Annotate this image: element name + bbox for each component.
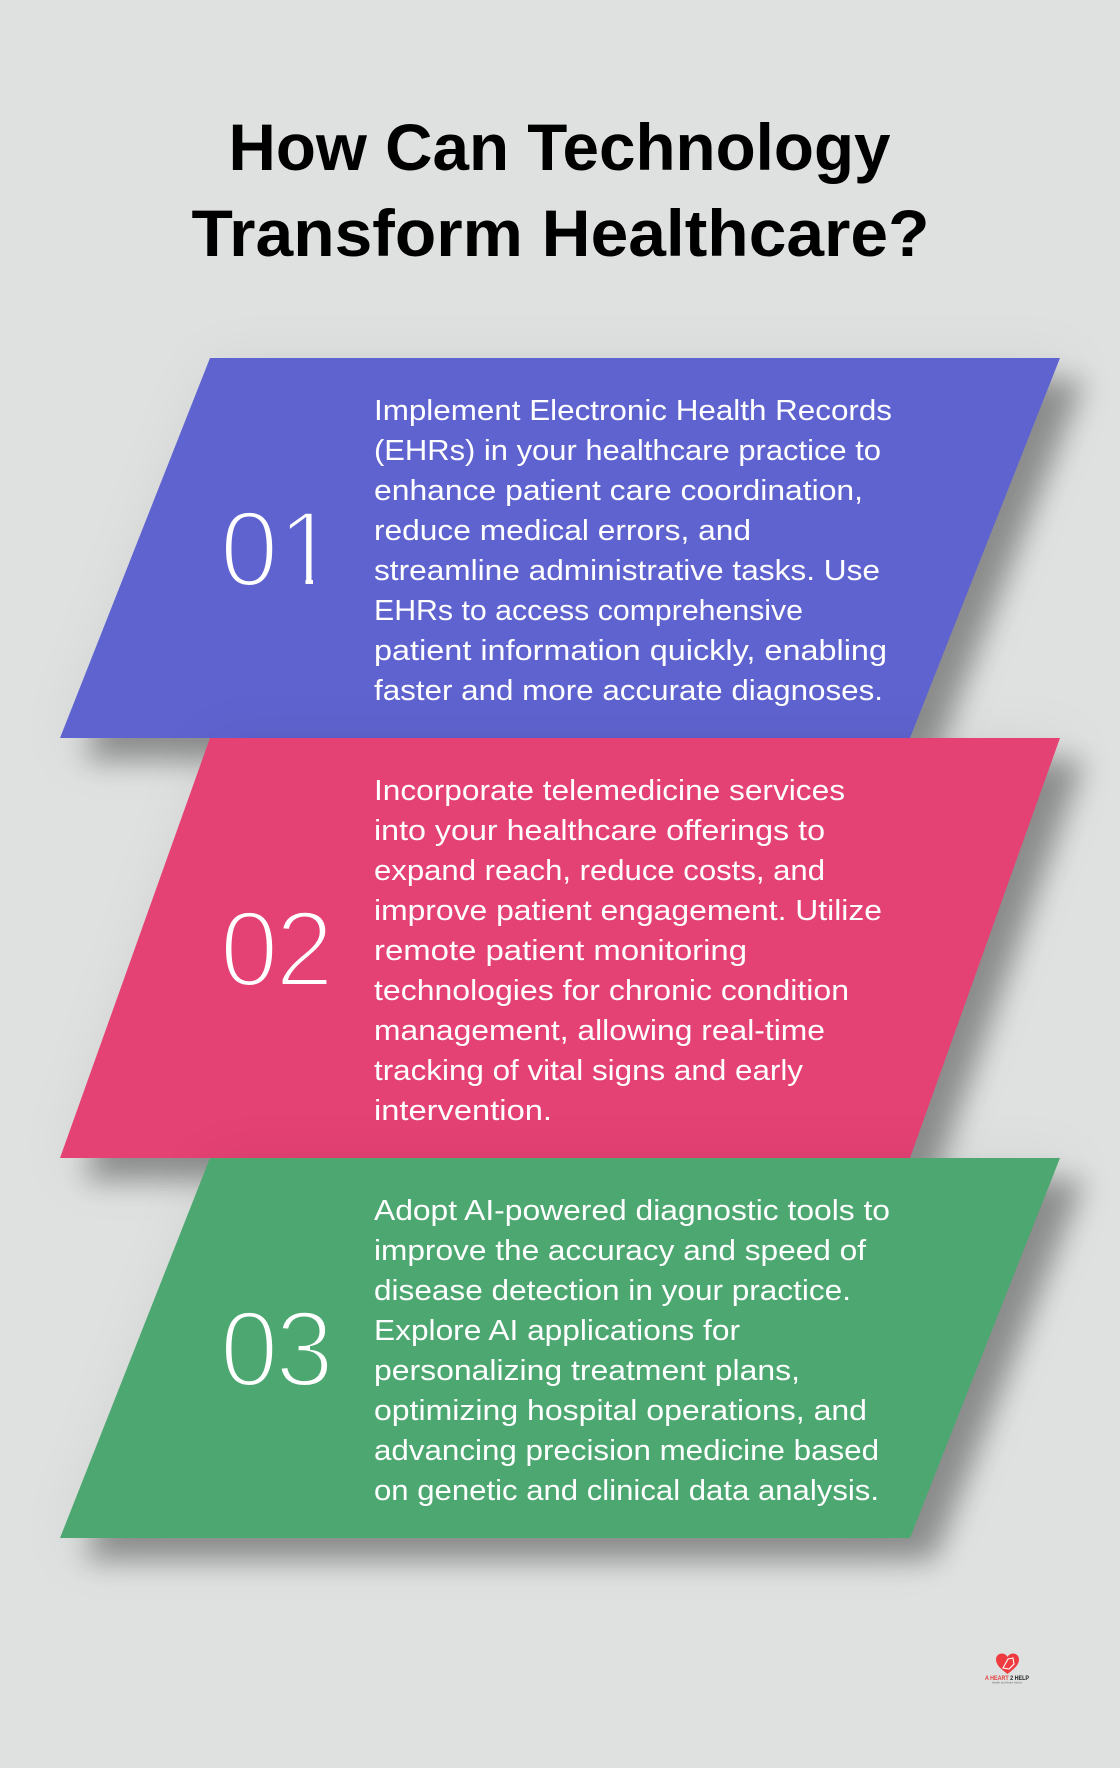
text: step 02 description: remote patient monitoring bbox=[374, 935, 747, 967]
text: step 01 description: enhance patient care coordination, bbox=[374, 475, 863, 507]
text: step 03 description: disease detection in your practice. bbox=[374, 1275, 851, 1307]
text: step 02 description bbox=[374, 775, 882, 1127]
text: step 03 description: Adopt AI-powered diagnostic tools to bbox=[374, 1195, 890, 1227]
panel shape: pink parallelogram bbox=[60, 738, 1060, 1158]
title: Transform Healthcare? bbox=[192, 196, 930, 270]
text: step 03 description: personalizing treatment plans, bbox=[374, 1355, 800, 1387]
text: step 01 description: faster and more accurate diagnoses. bbox=[374, 675, 883, 707]
panel: step 01 electronic health records bbox=[60, 358, 1060, 738]
text: step 02 description: intervention. bbox=[374, 1095, 552, 1127]
number 03: 03 bbox=[220, 1289, 331, 1409]
text: step 02 description: improve patient engagement. Utilize bbox=[374, 895, 882, 927]
logo tagline: Health and Heart Advice bbox=[992, 1680, 1023, 1684]
title: How Can Technology bbox=[228, 110, 891, 184]
text: step 03 description: advancing precision medicine based bbox=[374, 1435, 879, 1467]
text: step 02 description: management, allowing real-time bbox=[374, 1015, 825, 1047]
text: step 01 description: EHRs to access comprehensive bbox=[374, 595, 803, 627]
text: step 02 description: tracking of vital signs and early bbox=[374, 1055, 804, 1087]
logo: A Heart 2 Help bbox=[985, 1654, 1030, 1684]
panel shape: blue parallelogram bbox=[60, 358, 1060, 738]
text: step 01 description: streamline administrative tasks. Use bbox=[374, 555, 880, 587]
number 01: 01 bbox=[220, 489, 336, 609]
text: step 02 description: technologies for chronic condition bbox=[374, 975, 849, 1007]
text: step 03 description: optimizing hospital operations, and bbox=[374, 1395, 867, 1427]
text: step 01 description: patient information quickly, enabling bbox=[374, 635, 887, 667]
text: step 01 description bbox=[374, 395, 892, 707]
text: step 02 description: expand reach, reduce costs, and bbox=[374, 855, 825, 887]
number 02: 02 bbox=[220, 889, 331, 1009]
text: step 01 description: Implement Electronic Health Records bbox=[374, 395, 892, 427]
panel: step 02 telemedicine bbox=[60, 738, 1060, 1158]
text: step 03 description bbox=[374, 1195, 890, 1507]
text: step 03 description: Explore AI applications for bbox=[374, 1315, 740, 1347]
panel: step 03 AI diagnostics bbox=[60, 1158, 1060, 1538]
title bbox=[192, 110, 930, 270]
logo wordmark: A HEART 2 HELP bbox=[985, 1675, 1030, 1682]
text: step 02 description: Incorporate telemedicine services bbox=[374, 775, 845, 807]
text: step 03 description: improve the accuracy and speed of bbox=[374, 1235, 867, 1267]
text: step 01 description: reduce medical errors, and bbox=[374, 515, 751, 547]
text: step 01 description: (EHRs) in your healthcare practice to bbox=[374, 435, 881, 467]
icon: red heart with hand bbox=[996, 1654, 1019, 1674]
panel shape: green parallelogram bbox=[60, 1158, 1060, 1538]
text: step 03 description: on genetic and clinical data analysis. bbox=[374, 1475, 879, 1507]
text: step 02 description: into your healthcare offerings to bbox=[374, 815, 825, 847]
